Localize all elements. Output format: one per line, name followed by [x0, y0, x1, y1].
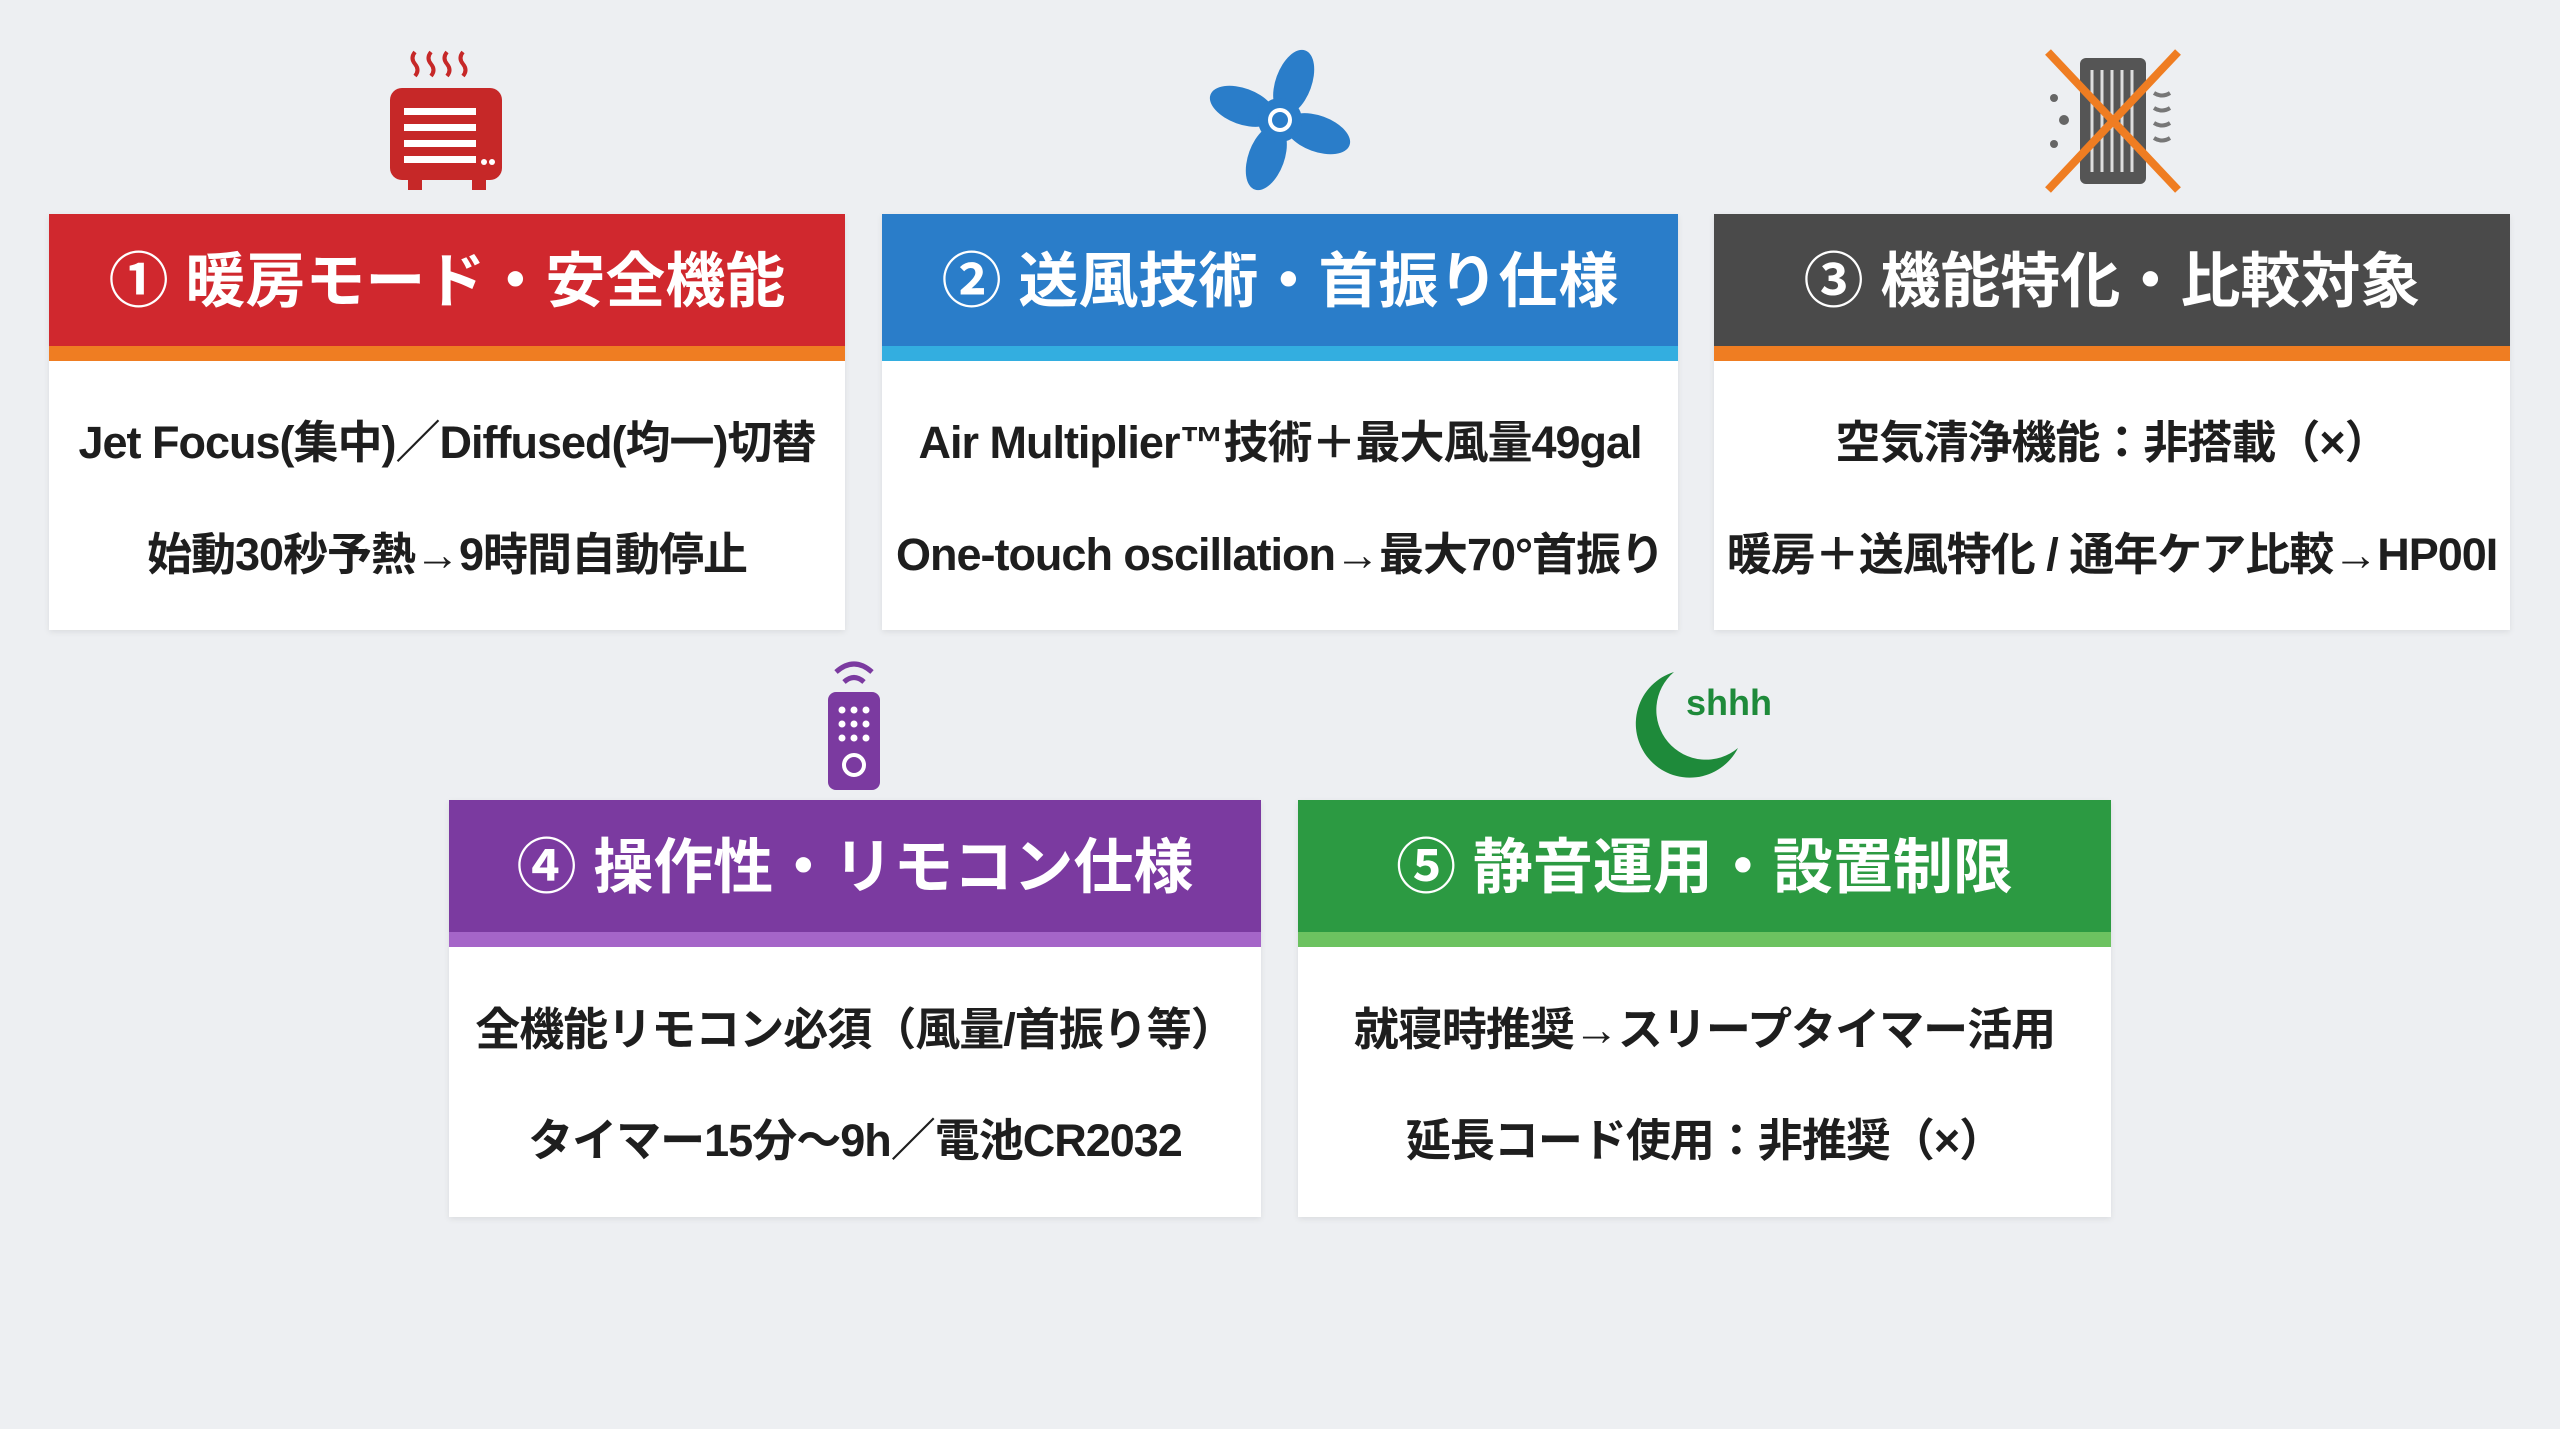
header 2: ② 送風技術・首振り仕様 — [942, 248, 1618, 315]
panel 3 — [1714, 214, 2510, 630]
icon: fan — [1210, 50, 1350, 190]
header 5 — [1298, 800, 2111, 947]
header 1 — [49, 214, 845, 361]
panel 5 — [1298, 800, 2111, 1217]
header 2 — [882, 214, 1678, 361]
header 4: ④ 操作性・リモコン仕様 — [517, 834, 1193, 901]
header 1: ① 暖房モード・安全機能 — [109, 248, 785, 315]
icon: moon shhh — [1636, 672, 1772, 778]
icon: remote — [828, 661, 880, 790]
icon: heater — [390, 50, 502, 190]
panel 4 — [449, 800, 1261, 1217]
text 2b: One-touch oscillation→最大70°首振り — [896, 529, 1664, 580]
header 4 — [449, 800, 1261, 947]
header 3 — [1714, 214, 2510, 361]
text 4b: タイマー15分〜9h／電池CR2032 — [528, 1115, 1182, 1166]
text 3a: 空気清浄機能：非搭載（×） — [1835, 417, 2389, 468]
text 5a: 就寝時推奨→スリープタイマー活用 — [1354, 1004, 2055, 1055]
icon: moon shhh: shhh — [1686, 682, 1772, 723]
panel 2 — [882, 214, 1678, 630]
panel 1 — [49, 214, 845, 630]
text 5b: 延長コード使用：非推奨（×） — [1406, 1115, 2003, 1166]
text 3b: 暖房＋送風特化 / 通年ケア比較→HP00I — [1727, 529, 2497, 580]
text 4a: 全機能リモコン必須（風量/首振り等） — [475, 1004, 1235, 1055]
icon: crossed filter — [2045, 49, 2181, 193]
text 1b: 始動30秒予熱→9時間自動停止 — [147, 529, 747, 580]
text 2a: Air Multiplier™技術＋最大風量49gal — [918, 417, 1642, 468]
text 1a: Jet Focus(集中)／Diffused(均一)切替 — [78, 417, 816, 468]
header 5: ⑤ 静音運用・設置制限 — [1396, 834, 2013, 901]
header 3: ③ 機能特化・比較対象 — [1804, 248, 2420, 315]
